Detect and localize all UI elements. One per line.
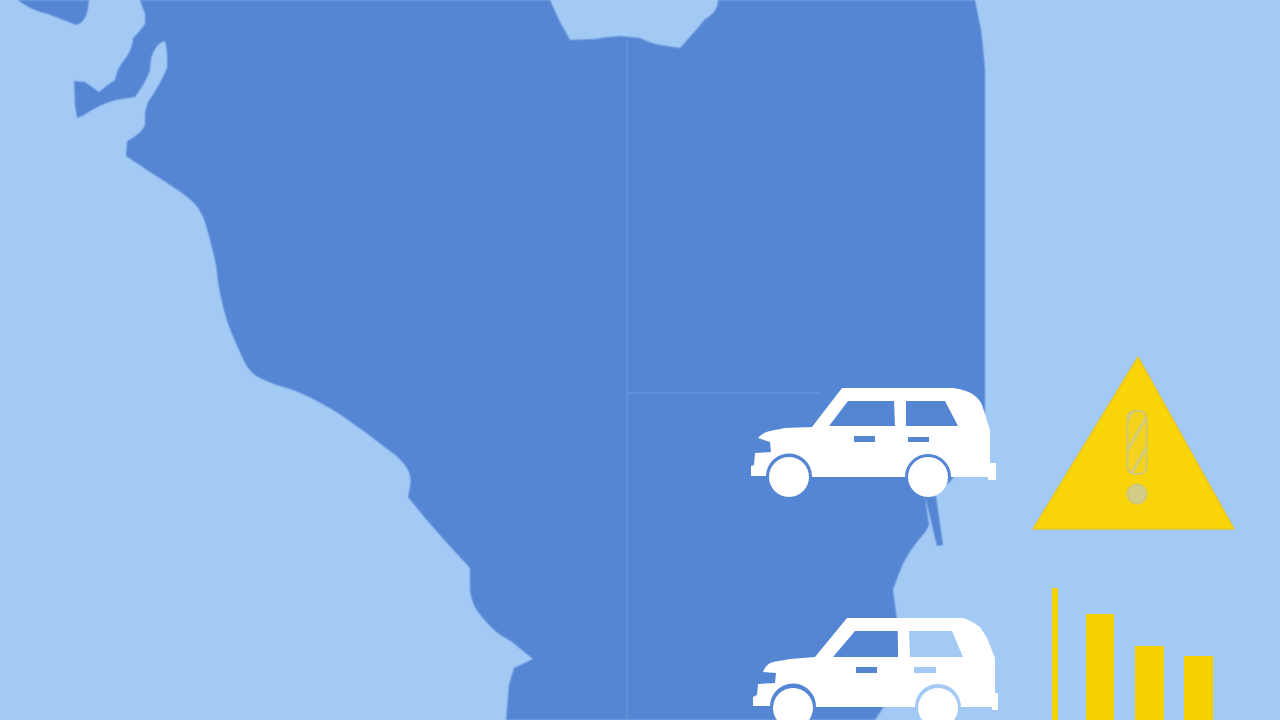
bar 4 — [1184, 656, 1213, 720]
exclamation mark bar — [1128, 411, 1146, 474]
map: narrow inlet — [925, 496, 943, 546]
exclamation mark dot — [1128, 484, 1146, 504]
icon: warning triangle — [1033, 357, 1234, 529]
map: land mass — [18, 0, 985, 720]
map: northwest island — [18, 0, 89, 25]
icon: white car, upper — [751, 388, 996, 497]
car wheels — [773, 688, 958, 720]
bar 1 — [1052, 588, 1058, 720]
bar 2 — [1086, 614, 1114, 720]
bar 3 — [1135, 646, 1164, 720]
map: main land — [74, 0, 985, 720]
icon: white car, lower — [753, 618, 998, 720]
car wheels — [769, 457, 948, 497]
bar chart — [1052, 588, 1213, 720]
map: faint region border lines — [627, 40, 820, 720]
